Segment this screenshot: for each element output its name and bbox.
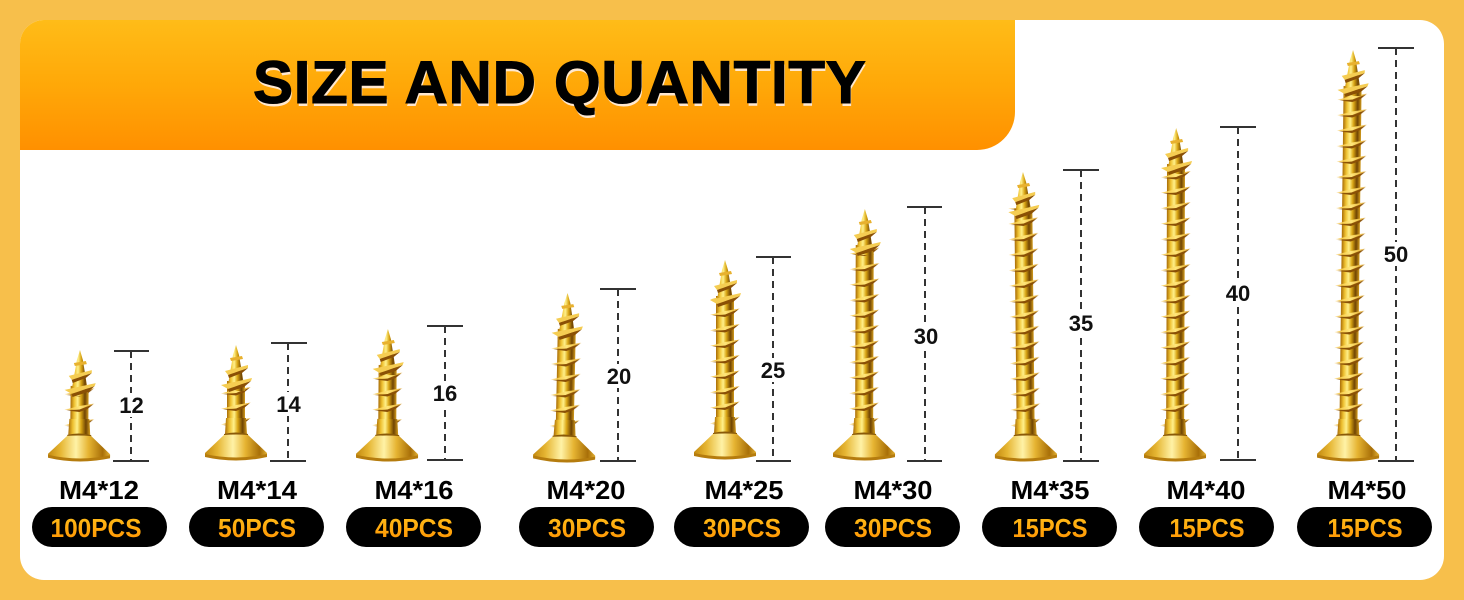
- screw group: M4*16: [346, 326, 481, 547]
- size label M4*40: M4*40: [1166, 475, 1246, 505]
- size label M4*12: M4*12: [59, 475, 139, 505]
- dimension line 25: [756, 257, 791, 461]
- dimension line 20: 20: [607, 364, 631, 389]
- screw M4*30: [833, 209, 896, 461]
- quantity pill 40PCS: [346, 507, 481, 547]
- dimension line 12: [113, 351, 149, 461]
- screw group: M4*30: [825, 207, 960, 547]
- dimension line 16: [427, 326, 463, 460]
- dimension line 16: 16: [433, 381, 457, 406]
- quantity pill 15PCS: [1297, 507, 1432, 547]
- size label M4*14: M4*14: [217, 475, 298, 505]
- dimension line 25: 25: [761, 358, 785, 383]
- quantity pill 30PCS: [825, 507, 960, 547]
- title banner: [20, 20, 1015, 150]
- quantity pill 50PCS: 50PCS: [218, 513, 296, 543]
- screw M4*50: [1317, 50, 1384, 462]
- dimension line 35: [1063, 170, 1099, 461]
- dimension line 14: [270, 343, 307, 461]
- quantity pill 30PCS: 30PCS: [703, 513, 781, 543]
- quantity pill 15PCS: 15PCS: [1170, 513, 1244, 543]
- screw M4*16: [356, 329, 419, 462]
- size label M4*25: M4*25: [704, 475, 784, 505]
- quantity pill 50PCS: [189, 507, 324, 547]
- screw M4*25: [694, 260, 756, 460]
- screw group: M4*35: [982, 170, 1117, 547]
- screw M4*35: [992, 172, 1057, 462]
- size label M4*30: M4*30: [854, 475, 932, 505]
- screw group: M4*14: [189, 343, 324, 547]
- dimension line 50: [1378, 48, 1414, 461]
- quantity pill 15PCS: [1139, 507, 1274, 547]
- quantity pill 15PCS: 15PCS: [1012, 513, 1088, 543]
- dimension line 30: 30: [914, 324, 938, 349]
- dimension line 30: [907, 207, 942, 461]
- screw group: M4*12: [32, 350, 167, 547]
- screw group: M4*20: [519, 289, 654, 547]
- quantity pill 30PCS: 30PCS: [548, 513, 626, 543]
- quantity pill 15PCS: [982, 507, 1117, 547]
- screw M4*20: [533, 292, 599, 463]
- dimension line 35: 35: [1069, 311, 1093, 336]
- screw group: M4*40: [1139, 127, 1274, 547]
- size label M4*35: M4*35: [1010, 475, 1090, 505]
- size label M4*50: M4*50: [1328, 475, 1406, 505]
- quantity pill 100PCS: 100PCS: [50, 513, 142, 543]
- dimension line 14: 14: [276, 392, 301, 417]
- size label M4*16: M4*16: [374, 475, 454, 505]
- quantity pill 40PCS: 40PCS: [375, 513, 453, 543]
- dimension line 50: 50: [1384, 242, 1408, 267]
- size label M4*20: M4*20: [546, 475, 626, 505]
- dimension line 20: [600, 289, 636, 461]
- dimension line 40: 40: [1226, 281, 1250, 306]
- screw M4*40: [1144, 128, 1207, 462]
- screw M4*14: [205, 345, 267, 460]
- dimension line 40: [1220, 127, 1256, 460]
- screw group: M4*25: [674, 257, 809, 547]
- quantity pill 15PCS: 15PCS: [1328, 513, 1402, 543]
- quantity pill 30PCS: [674, 507, 809, 547]
- screw group: M4*50: [1297, 48, 1432, 547]
- screw M4*12: [48, 350, 111, 462]
- title: SIZE AND QUANTITY: [253, 49, 867, 116]
- quantity pill 30PCS: 30PCS: [854, 513, 932, 543]
- dimension line 12: 12: [119, 393, 144, 418]
- quantity pill 100PCS: [32, 507, 167, 547]
- quantity pill 30PCS: [519, 507, 654, 547]
